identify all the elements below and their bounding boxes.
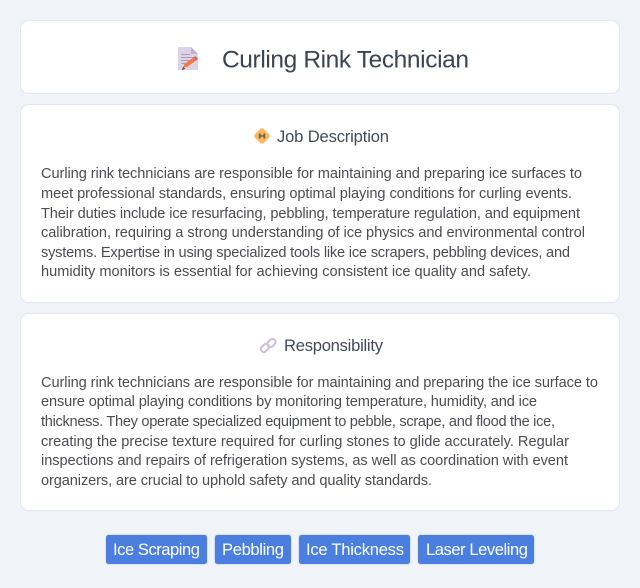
icon: chain link — [260, 338, 277, 353]
text block: responsibility: ensure optimal playing conditions by monitoring temperature, humidity, and ice — [41, 394, 537, 410]
text block: responsibility: thickness. They operate specialized equipment to pebble, scrape, and flood the ice, — [41, 414, 555, 430]
text block: job description: humidity monitors is essential for achieving consistent ice quality and safety. — [41, 264, 531, 280]
text block: job description: calibration, requiring a strong understanding of ice physics and environmental control — [41, 225, 585, 241]
title: Curling Rink Technician — [222, 46, 469, 74]
text block: job description: meet professional standards, ensuring optimal playing conditions for curling events. — [41, 186, 572, 202]
text block: responsibility: inspections and repairs of refrigeration systems, as well as coordination with event — [41, 453, 568, 469]
panel: responsibility — [20, 314, 620, 510]
tag: pebbling — [214, 534, 292, 564]
heading: responsibility: Responsibility — [284, 336, 384, 355]
text block: responsibility — [41, 375, 598, 489]
text block: responsibility: creating the precise texture required for curling stones to glide accurately. Regular — [41, 434, 569, 450]
tag: ice scraping — [106, 534, 208, 564]
text block: job description — [41, 166, 585, 280]
tags row — [106, 534, 534, 564]
tag: ice thickness — [298, 534, 410, 564]
text block: job description: systems. Expertise in using specialized tools like ice scrapers, pebbling devices, and — [41, 245, 570, 261]
icon: document with pencil — [178, 47, 198, 70]
tag: pebbling: Pebbling — [222, 540, 284, 559]
text block: responsibility: Curling rink technicians are responsible for maintaining and preparing the ice surface to — [41, 375, 598, 391]
panel: title header — [20, 20, 620, 94]
tag: laser leveling: Laser Leveling — [426, 540, 528, 559]
tag: laser leveling — [418, 534, 534, 564]
text block: responsibility: organizers, are crucial to uphold safety and quality standards. — [41, 473, 432, 489]
tag: ice scraping: Ice Scraping — [113, 540, 200, 559]
panel: job description — [20, 104, 620, 302]
tag: ice thickness: Ice Thickness — [306, 540, 404, 559]
icon: orange diamond sign — [253, 127, 271, 145]
text block: job description: Curling rink technicians are responsible for maintaining and preparing ice surfaces to — [41, 166, 582, 182]
heading: job description: Job Description — [277, 127, 389, 146]
text block: job description: Their duties include ice resurfacing, pebbling, temperature regulation, and equipment — [41, 206, 580, 222]
